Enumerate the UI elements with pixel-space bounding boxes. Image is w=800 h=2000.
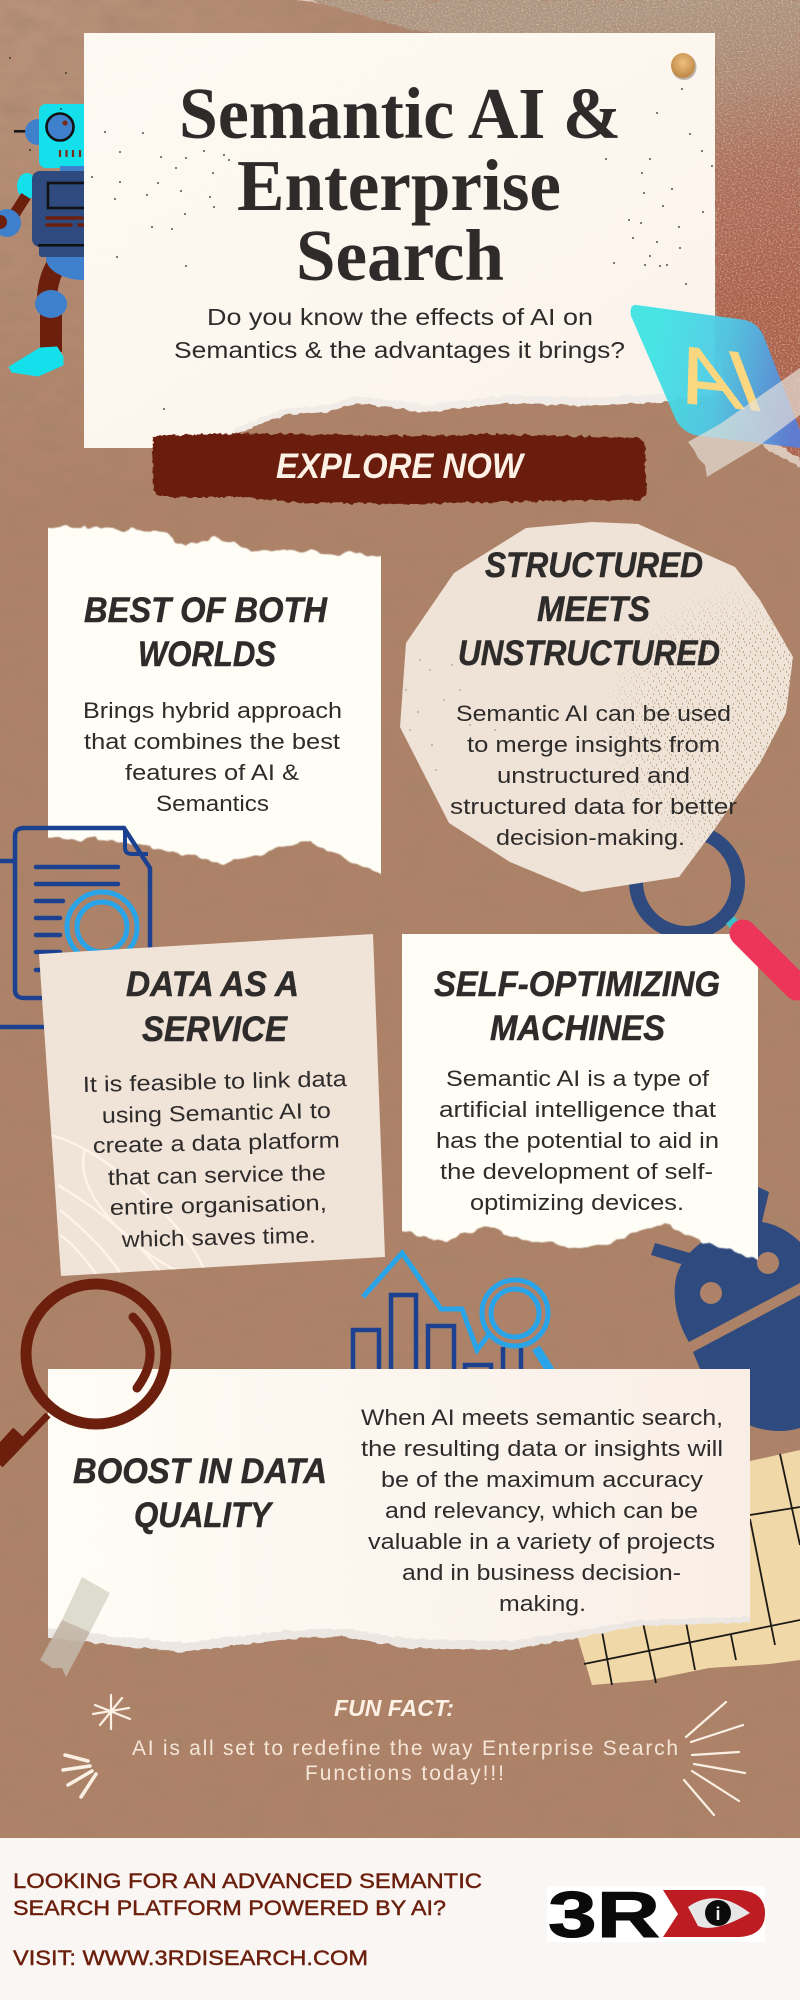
- body text: It is feasible to link data: [83, 1066, 348, 1097]
- icon: AI badge with tape: AI: [659, 328, 774, 430]
- heading: [126, 965, 299, 1049]
- body text: [83, 1066, 348, 1252]
- icon: brown magnifier: [0, 1284, 166, 1465]
- body text: to merge insights from: [467, 732, 720, 757]
- panel: title card: [84, 33, 715, 448]
- body text: [436, 1066, 719, 1215]
- body text: When AI meets semantic search,: [361, 1405, 723, 1430]
- tape strip: [40, 1577, 110, 1677]
- body text: entire organisation,: [110, 1190, 327, 1220]
- title: Semantic AI &: [179, 73, 621, 154]
- icon: bar chart with magnifier: [353, 1253, 551, 1372]
- callout: fun fact: Functions today!!!: [305, 1762, 504, 1785]
- button: explore now: [152, 433, 647, 504]
- icon: robot: [0, 104, 122, 376]
- callout: fun fact: [132, 1695, 678, 1785]
- footer text: SEARCH PLATFORM POWERED BY AI?: [13, 1896, 446, 1920]
- icon: gold pin: [671, 53, 696, 80]
- body text: which saves time.: [120, 1223, 316, 1252]
- title: Search: [296, 215, 504, 296]
- body text: valuable in a variety of projects: [368, 1529, 715, 1554]
- heading: [458, 546, 720, 673]
- subtitle: [174, 304, 625, 363]
- heading: BOOST IN DATA: [73, 1452, 327, 1491]
- panel: structured meets unstructured: [400, 500, 800, 900]
- body text: unstructured and: [497, 763, 690, 788]
- panel: data as a service: [39, 934, 385, 1280]
- callout: fun fact: FUN FACT:: [334, 1695, 454, 1721]
- body text: [450, 701, 737, 850]
- icon: android robot: [651, 1187, 800, 1431]
- heading: [84, 591, 328, 674]
- icon: left burst: [63, 1755, 96, 1797]
- heading: DATA AS A: [126, 965, 299, 1004]
- icon: AI badge with tape: [631, 305, 800, 477]
- panel: best of both worlds: [48, 524, 381, 876]
- title: [179, 73, 621, 296]
- body text: has the potential to aid in: [436, 1128, 719, 1153]
- icon: star sparkle: [93, 1695, 130, 1729]
- heading: SERVICE: [142, 1010, 289, 1049]
- body text: be of the maximum accuracy: [381, 1467, 703, 1492]
- body text: using Semantic AI to: [102, 1098, 331, 1128]
- heading: UNSTRUCTURED: [458, 634, 720, 673]
- body text: Brings hybrid approach: [83, 698, 342, 723]
- torn copper paper, top right: [296, 0, 800, 468]
- body text: create a data platform: [93, 1127, 340, 1158]
- title: Enterprise: [237, 145, 561, 226]
- body text: decision-making.: [496, 825, 685, 850]
- heading: [434, 965, 720, 1048]
- logo: 3RDi: i: [715, 1904, 721, 1924]
- heading: BEST OF BOTH: [84, 591, 328, 630]
- body text: that combines the best: [84, 729, 340, 754]
- panel: boost in data quality: [48, 1369, 750, 1653]
- footer text: LOOKING FOR AN ADVANCED SEMANTIC: [13, 1869, 482, 1893]
- body text: Semantic AI can be used: [456, 701, 731, 726]
- logo: 3RDi: 3R: [548, 1878, 660, 1951]
- footer band: [0, 1838, 800, 2000]
- icon: right burst: [684, 1702, 745, 1815]
- subtitle: Semantics & the advantages it brings?: [174, 337, 625, 363]
- panel: self-optimizing machines: [402, 934, 758, 1261]
- body text: and relevancy, which can be: [385, 1498, 698, 1523]
- body text: features of AI &: [125, 760, 299, 785]
- body text: the development of self-: [440, 1159, 713, 1184]
- body text: making.: [499, 1591, 586, 1616]
- body text: [83, 698, 342, 816]
- body text: Semantics: [156, 791, 269, 816]
- heading: QUALITY: [134, 1496, 273, 1535]
- body text: artificial intelligence that: [439, 1097, 716, 1122]
- icon: document: [0, 828, 150, 1027]
- body text: that can service the: [108, 1160, 326, 1190]
- body text: the resulting data or insights will: [361, 1436, 723, 1461]
- heading: SELF-OPTIMIZING: [434, 965, 720, 1004]
- graph paper: [577, 1450, 800, 1685]
- callout: fun fact: AI is all set to redefine the way Enterprise Search: [132, 1737, 678, 1760]
- body text: and in business decision-: [402, 1560, 681, 1585]
- icon: blue magnifier: [636, 831, 745, 936]
- footer text: VISIT: WWW.3RDISEARCH.COM: [13, 1946, 368, 1970]
- logo: 3RDi: [547, 1878, 765, 1951]
- heading: MACHINES: [490, 1009, 665, 1048]
- heading: MEETS: [537, 590, 650, 629]
- icon: red magnifier handle: [743, 933, 797, 987]
- heading: [73, 1452, 327, 1535]
- body text: Semantic AI is a type of: [446, 1066, 710, 1091]
- heading: WORLDS: [138, 635, 276, 674]
- button: explore now: EXPLORE NOW: [276, 447, 526, 486]
- body text: [361, 1405, 723, 1616]
- subtitle: Do you know the effects of AI on: [207, 304, 593, 330]
- footer text: [13, 1869, 482, 1970]
- body text: structured data for better: [450, 794, 737, 819]
- body text: optimizing devices.: [470, 1190, 684, 1215]
- heading: STRUCTURED: [485, 546, 703, 585]
